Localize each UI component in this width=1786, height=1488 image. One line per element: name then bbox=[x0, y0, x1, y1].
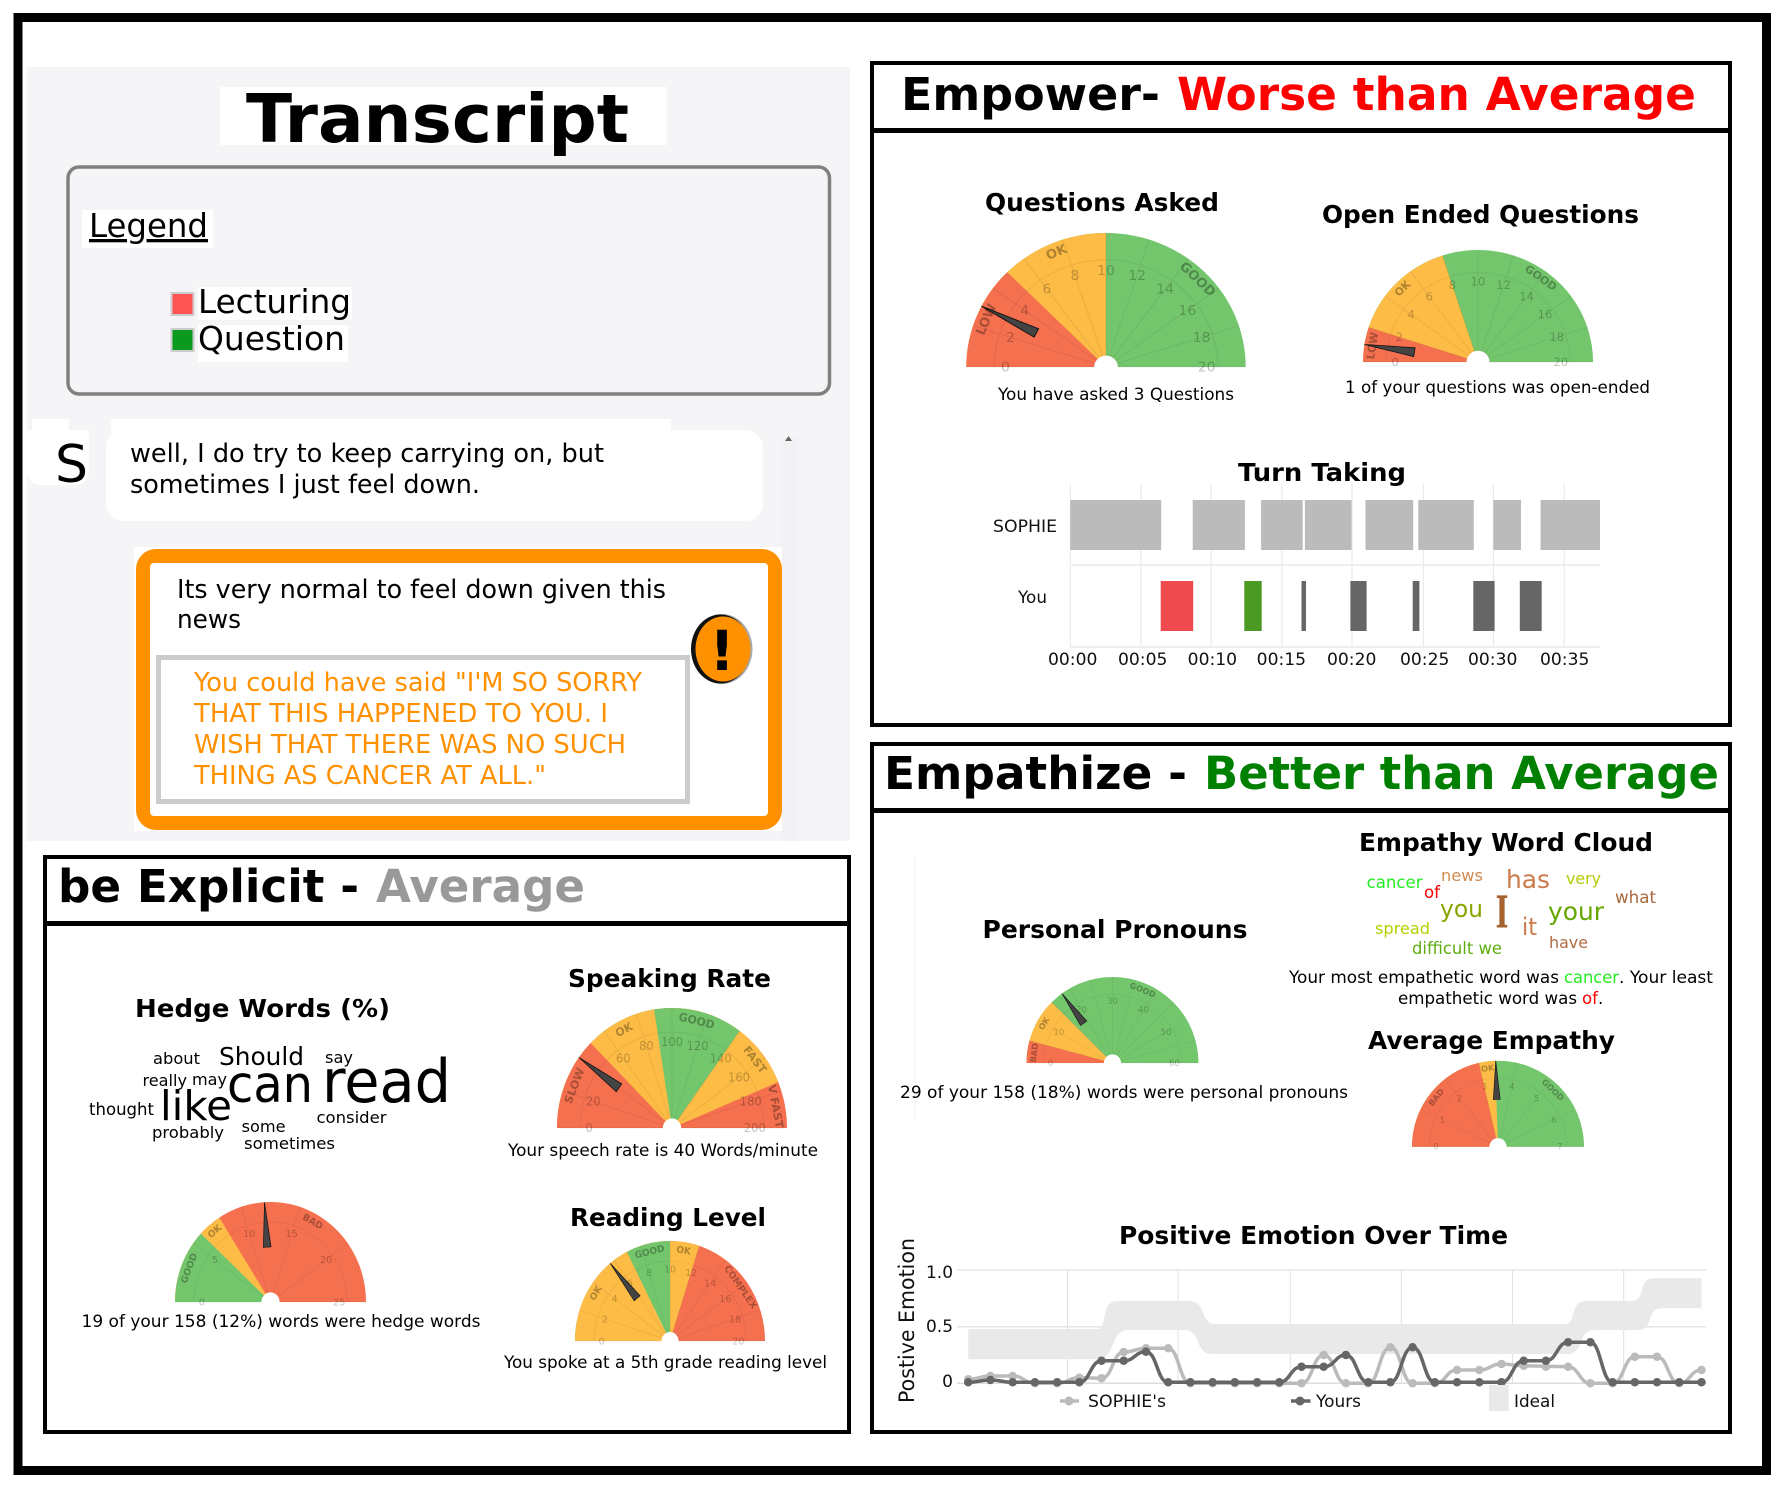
word cloud: hedge words bbox=[89, 1042, 451, 1153]
gauge needle bbox=[261, 1202, 271, 1247]
heading: speaking rate: Speaking Rate bbox=[568, 964, 771, 993]
y axis labels: 0.5 bbox=[926, 1317, 953, 1337]
gauge: average empathy: 1 bbox=[1439, 1116, 1445, 1126]
word cloud: empathy bbox=[1367, 865, 1656, 959]
axis labels: turn taking: 00:10 bbox=[1188, 650, 1237, 670]
caption: open ended questions: 1 of your questions was open-ended bbox=[1345, 377, 1650, 397]
y axis labels bbox=[926, 1263, 953, 1392]
line: SOPHIE's bbox=[968, 1347, 1702, 1383]
word cloud: empathy: very bbox=[1566, 869, 1601, 888]
heading: open ended questions: Open Ended Questions bbox=[1322, 200, 1639, 229]
word cloud: hedge words: probably bbox=[152, 1123, 224, 1142]
gauge: open ended questions: OK bbox=[1392, 277, 1414, 299]
gauge: speaking rate: 140 bbox=[710, 1051, 732, 1065]
caption: questions asked: You have asked 3 Questions bbox=[997, 384, 1234, 404]
gauge: open ended questions: 10 bbox=[1471, 274, 1485, 288]
gauge: reading level bbox=[575, 1241, 765, 1350]
word cloud: hedge words: consider bbox=[316, 1108, 387, 1127]
axis labels: turn taking: 00:30 bbox=[1468, 650, 1517, 670]
caption: empathy words: . Your least bbox=[1619, 967, 1713, 987]
caption: hedge words: 19 of your 158 (12%) words were hedge words bbox=[82, 1311, 481, 1331]
gauge: reading level: 8 bbox=[646, 1268, 652, 1279]
word cloud: empathy: I bbox=[1496, 888, 1508, 938]
word cloud: empathy: what bbox=[1615, 887, 1656, 907]
gauge: speaking rate: 100 bbox=[661, 1035, 683, 1049]
gauge: reading level: 14 bbox=[704, 1278, 716, 1289]
word cloud: hedge words: can bbox=[227, 1056, 313, 1115]
gauge: speaking rate: GOOD bbox=[677, 1010, 716, 1032]
word cloud: empathy: have bbox=[1549, 933, 1588, 952]
gauge: questions asked: 16 bbox=[1178, 303, 1196, 319]
legend box: Legend bbox=[89, 206, 208, 245]
speaker avatar S bbox=[27, 419, 89, 495]
gauge: personal pronouns: 60 bbox=[1169, 1059, 1180, 1069]
line: yours bbox=[968, 1342, 1702, 1382]
icon: alert: ! bbox=[709, 619, 735, 683]
gauge: open ended questions: 12 bbox=[1496, 278, 1511, 292]
gauge: speaking rate: OK bbox=[613, 1020, 635, 1040]
word cloud: hedge words: sometimes bbox=[244, 1134, 335, 1153]
axis labels: turn taking: 00:20 bbox=[1327, 650, 1376, 670]
gauge zones bbox=[966, 233, 1246, 367]
panel: be explicit bbox=[43, 857, 851, 1432]
suggestion box: You could have said "I'M SO SORRY bbox=[193, 668, 642, 698]
gauge: speaking rate: 180 bbox=[740, 1094, 762, 1109]
panel: transcript bbox=[27, 67, 850, 841]
chart: positive emotion over time bbox=[895, 1238, 1706, 1412]
suggestion box: WISH THAT THERE WAS NO SUCH bbox=[194, 730, 626, 760]
gauge: open ended questions: 0 bbox=[1392, 355, 1399, 369]
panel heading: empathize: Better than Average bbox=[1204, 747, 1719, 800]
gauge: open ended questions: 8 bbox=[1449, 278, 1456, 292]
panel heading: empower: Empower- bbox=[901, 68, 1160, 121]
gauge: hedge words: 5 bbox=[212, 1255, 218, 1266]
gauge: average empathy: 5 bbox=[1534, 1094, 1539, 1104]
gauge: average empathy: 0 bbox=[1433, 1143, 1439, 1153]
gauge: hedge words: 10 bbox=[243, 1229, 255, 1240]
gauge: open ended questions: 20 bbox=[1553, 355, 1568, 369]
panel heading: empower bbox=[901, 68, 1696, 121]
heading: hedge words: Hedge Words (%) bbox=[135, 994, 390, 1023]
suggestion box bbox=[158, 658, 688, 802]
caption: empathy words bbox=[1288, 967, 1713, 1008]
gauge: questions asked bbox=[966, 233, 1246, 378]
speaker bubble bbox=[106, 419, 763, 521]
gauge: speaking rate: 200 bbox=[744, 1121, 766, 1135]
row: SOPHIE turns bbox=[1070, 500, 1600, 550]
caption: empathy words: cancer bbox=[1564, 967, 1619, 987]
legend label: question: Question bbox=[198, 320, 345, 358]
chart: turn taking bbox=[993, 484, 1600, 670]
gauge: questions asked: 0 bbox=[1001, 360, 1010, 376]
heading: empathy word cloud: Empathy Word Cloud bbox=[1359, 828, 1653, 857]
gauge: questions asked: 20 bbox=[1198, 360, 1215, 376]
caption: empathy words: . bbox=[1598, 988, 1603, 1008]
gauge: average empathy: 7 bbox=[1557, 1143, 1563, 1153]
gauge: open ended questions: 18 bbox=[1549, 330, 1564, 344]
gauge: questions asked: OK bbox=[1044, 242, 1070, 264]
word cloud: empathy: you bbox=[1440, 895, 1483, 923]
suggestion box: THING AS CANCER AT ALL." bbox=[193, 761, 546, 791]
gauge: personal pronouns: OK bbox=[1036, 1015, 1052, 1032]
word cloud: hedge words: like bbox=[160, 1082, 232, 1130]
word cloud: hedge words: may bbox=[192, 1070, 227, 1089]
gauge: personal pronouns: 40 bbox=[1138, 1005, 1149, 1015]
gauge: hedge words: BAD bbox=[300, 1212, 325, 1233]
gauge needle bbox=[607, 1261, 640, 1301]
panel: empathize bbox=[870, 744, 1732, 1432]
gauge: reading level: 16 bbox=[719, 1294, 731, 1305]
gauge zones bbox=[1026, 977, 1198, 1063]
gauge: reading level: 20 bbox=[732, 1336, 744, 1348]
feedback callout: news bbox=[177, 605, 241, 635]
gauge: reading level: 10 bbox=[664, 1264, 676, 1276]
gauge: reading level: GOOD bbox=[634, 1243, 666, 1261]
gauge: hedge words: 25 bbox=[333, 1297, 345, 1309]
gauge: hedge words: 0 bbox=[199, 1297, 205, 1309]
word cloud: hedge words: really bbox=[142, 1071, 187, 1090]
gauge: reading level: 18 bbox=[729, 1314, 741, 1325]
word cloud: hedge words: about bbox=[153, 1049, 200, 1068]
word cloud: empathy: it bbox=[1522, 913, 1537, 941]
gauge: personal pronouns: 0 bbox=[1048, 1059, 1053, 1069]
gauge: average empathy bbox=[1412, 1061, 1584, 1155]
gauge: open ended questions: 6 bbox=[1426, 290, 1433, 304]
gauge zones bbox=[575, 1241, 765, 1341]
heading: reading level: Reading Level bbox=[570, 1203, 766, 1232]
gauge: average empathy: GOOD bbox=[1540, 1077, 1567, 1103]
gauge: questions asked: 10 bbox=[1097, 263, 1115, 279]
gauge: average empathy: BAD bbox=[1426, 1086, 1446, 1108]
heading: turn taking: Turn Taking bbox=[1238, 458, 1406, 487]
gauge: reading level: 2 bbox=[602, 1314, 608, 1325]
panel heading: be explicit: Average bbox=[376, 860, 585, 913]
chart legend bbox=[1060, 1385, 1555, 1412]
gauge: average empathy: OK bbox=[1480, 1062, 1496, 1074]
gauge: hedge words: GOOD bbox=[179, 1251, 200, 1285]
gauge: speaking rate: 20 bbox=[586, 1094, 601, 1109]
legend label: lecturing: Lecturing bbox=[198, 283, 351, 321]
word cloud: empathy: your bbox=[1548, 897, 1605, 926]
chart legend: SOPHIE's bbox=[1088, 1392, 1166, 1412]
panel heading: empathize bbox=[884, 747, 1719, 800]
axis labels: turn taking: 00:00 bbox=[1048, 650, 1097, 670]
gauge: questions asked: 6 bbox=[1042, 282, 1051, 298]
gauge: questions asked: 8 bbox=[1070, 268, 1079, 284]
gauge zones bbox=[175, 1202, 366, 1302]
gauge: speaking rate: 0 bbox=[586, 1121, 593, 1135]
panel heading: be explicit bbox=[58, 860, 585, 913]
gauge: reading level: 0 bbox=[599, 1336, 605, 1348]
axis labels: turn taking: 00:25 bbox=[1400, 650, 1449, 670]
caption: speech rate: Your speech rate is 40 Words/minute bbox=[507, 1140, 818, 1160]
word cloud: empathy: news bbox=[1441, 866, 1483, 885]
gauge zones bbox=[1363, 250, 1593, 362]
caption: reading level: You spoke at a 5th grade reading level bbox=[503, 1352, 827, 1372]
y axis labels: 0 bbox=[942, 1372, 953, 1392]
axis labels: turn taking bbox=[993, 517, 1589, 670]
gauge: open ended questions: 4 bbox=[1407, 308, 1415, 321]
gauge: reading level: 6 bbox=[627, 1278, 633, 1289]
gauge: personal pronouns: BAD bbox=[1028, 1042, 1040, 1063]
word cloud: hedge words: some bbox=[242, 1117, 286, 1136]
word cloud: hedge words: say bbox=[325, 1048, 353, 1067]
feedback callout bbox=[134, 547, 782, 831]
gauge: personal pronouns: GOOD bbox=[1128, 980, 1158, 1000]
gauge: hedge words: 15 bbox=[286, 1229, 298, 1240]
gauge: open ended questions bbox=[1363, 250, 1593, 373]
panel: empower bbox=[870, 63, 1732, 725]
word cloud: hedge words: read bbox=[322, 1047, 451, 1117]
gauge: speaking rate: 80 bbox=[639, 1039, 654, 1053]
gauge: speaking rate: V FAST bbox=[765, 1084, 786, 1130]
caption: empathy words: Your most empathetic word was bbox=[1288, 967, 1559, 987]
icon: alert bbox=[691, 614, 752, 684]
gauge: reading level: 4 bbox=[612, 1294, 618, 1305]
legend swatch: question bbox=[172, 329, 194, 351]
word cloud: empathy: spread bbox=[1375, 919, 1430, 938]
gauge: speaking rate: 160 bbox=[728, 1070, 750, 1084]
gauge: speaking rate: 60 bbox=[616, 1051, 631, 1065]
heading: average empathy: Average Empathy bbox=[1368, 1026, 1615, 1055]
gauge: questions asked: 18 bbox=[1193, 330, 1211, 346]
legend box bbox=[68, 167, 830, 394]
gauge zones bbox=[557, 1008, 787, 1128]
gauge: reading level: OK bbox=[675, 1244, 692, 1258]
heading: personal pronouns: Personal Pronouns bbox=[982, 915, 1248, 944]
gauge: open ended questions: GOOD bbox=[1522, 262, 1559, 294]
word cloud: empathy: has bbox=[1506, 865, 1550, 894]
caption: empathy words: of bbox=[1582, 988, 1599, 1008]
gauge: reading level: OK bbox=[588, 1283, 605, 1303]
axis labels: turn taking: 00:35 bbox=[1540, 650, 1589, 670]
speaker avatar S: S bbox=[55, 435, 88, 495]
gauge: reading level: 12 bbox=[685, 1268, 697, 1279]
gauge: open ended questions: 14 bbox=[1519, 290, 1534, 304]
axis labels: turn taking: 00:15 bbox=[1257, 650, 1306, 670]
gauge: hedge words: 20 bbox=[320, 1255, 332, 1266]
gauge: average empathy: 4 bbox=[1509, 1082, 1515, 1092]
word cloud: hedge words: Should bbox=[219, 1042, 304, 1071]
gauge: questions asked: 4 bbox=[1020, 303, 1029, 319]
panel heading: be explicit: be Explicit - bbox=[58, 860, 359, 913]
speaker bubble: well, I do try to keep carrying on, but bbox=[130, 439, 604, 469]
gauge: open ended questions: 2 bbox=[1396, 330, 1403, 344]
gauge: personal pronouns: 30 bbox=[1107, 997, 1118, 1007]
axis labels: turn taking: SOPHIE bbox=[993, 517, 1057, 537]
gauge: questions asked: 12 bbox=[1128, 268, 1146, 284]
gauge: questions asked: LOW bbox=[973, 302, 1001, 338]
gauge: personal pronouns: 50 bbox=[1161, 1028, 1172, 1038]
word cloud: hedge words: thought bbox=[89, 1100, 155, 1119]
gauge zones bbox=[1412, 1061, 1584, 1147]
gauge: hedge words bbox=[175, 1202, 366, 1312]
gauge needle bbox=[1364, 340, 1415, 357]
gauge: hedge words: OK bbox=[206, 1222, 225, 1241]
gauge needle bbox=[1059, 991, 1087, 1026]
speaker bubble: sometimes I just feel down. bbox=[130, 470, 480, 500]
gauge: speaking rate: 120 bbox=[687, 1039, 709, 1053]
heading: positive emotion over time: Positive Emotion Over Time bbox=[1119, 1221, 1508, 1250]
heading: questions asked: Questions Asked bbox=[985, 188, 1219, 217]
gauge: personal pronouns bbox=[1026, 977, 1198, 1072]
gauge: speaking rate: SLOW bbox=[562, 1066, 587, 1106]
word cloud: empathy: of bbox=[1424, 883, 1441, 902]
axis labels: turn taking: You bbox=[1017, 588, 1047, 608]
scrollbar bbox=[780, 436, 797, 841]
gauge: average empathy: 6 bbox=[1551, 1116, 1557, 1126]
gauge: questions asked: GOOD bbox=[1176, 259, 1218, 300]
gauge needle bbox=[979, 302, 1039, 337]
heading: transcript: Transcript bbox=[246, 80, 629, 158]
caption: empathy words: empathetic word was bbox=[1398, 988, 1577, 1008]
y axis title: Postive Emotion bbox=[895, 1238, 919, 1403]
axis labels: turn taking: 00:05 bbox=[1118, 650, 1167, 670]
gauge: open ended questions: 16 bbox=[1538, 308, 1552, 321]
gauge needle bbox=[1492, 1061, 1500, 1100]
row: your turns bbox=[1161, 581, 1542, 631]
word cloud: empathy: difficult we bbox=[1412, 939, 1502, 959]
chart legend: Ideal bbox=[1514, 1392, 1555, 1412]
feedback callout: Its very normal to feel down given this bbox=[177, 575, 666, 605]
gauge: average empathy: 2 bbox=[1457, 1094, 1462, 1104]
word cloud: empathy: cancer bbox=[1367, 873, 1423, 892]
chart legend: Yours bbox=[1315, 1392, 1361, 1412]
gauge: questions asked: 2 bbox=[1006, 330, 1015, 346]
panel heading: empower: Worse than Average bbox=[1177, 68, 1696, 121]
gauge: speaking rate bbox=[557, 1008, 787, 1138]
gauge: reading level: COMPLEX bbox=[721, 1263, 759, 1311]
gauge: questions asked: 14 bbox=[1156, 282, 1174, 298]
panel heading: empathize: Empathize - bbox=[884, 747, 1187, 800]
legend swatch: lecturing bbox=[172, 293, 194, 315]
gauge: average empathy: 3 bbox=[1481, 1082, 1487, 1092]
gauge: open ended questions: LOW bbox=[1364, 331, 1381, 360]
y axis labels: 1.0 bbox=[926, 1263, 953, 1283]
gauge needle bbox=[576, 1054, 622, 1092]
gauge: speaking rate: FAST bbox=[741, 1044, 769, 1077]
gauge: personal pronouns: 10 bbox=[1053, 1028, 1064, 1038]
ideal band bbox=[968, 1278, 1702, 1359]
suggestion box: THAT THIS HAPPENED TO YOU. I bbox=[193, 699, 608, 729]
caption: personal pronouns: 29 of your 158 (18%) words were personal pronouns bbox=[900, 1082, 1348, 1102]
gauge: personal pronouns: 20 bbox=[1076, 1005, 1087, 1015]
